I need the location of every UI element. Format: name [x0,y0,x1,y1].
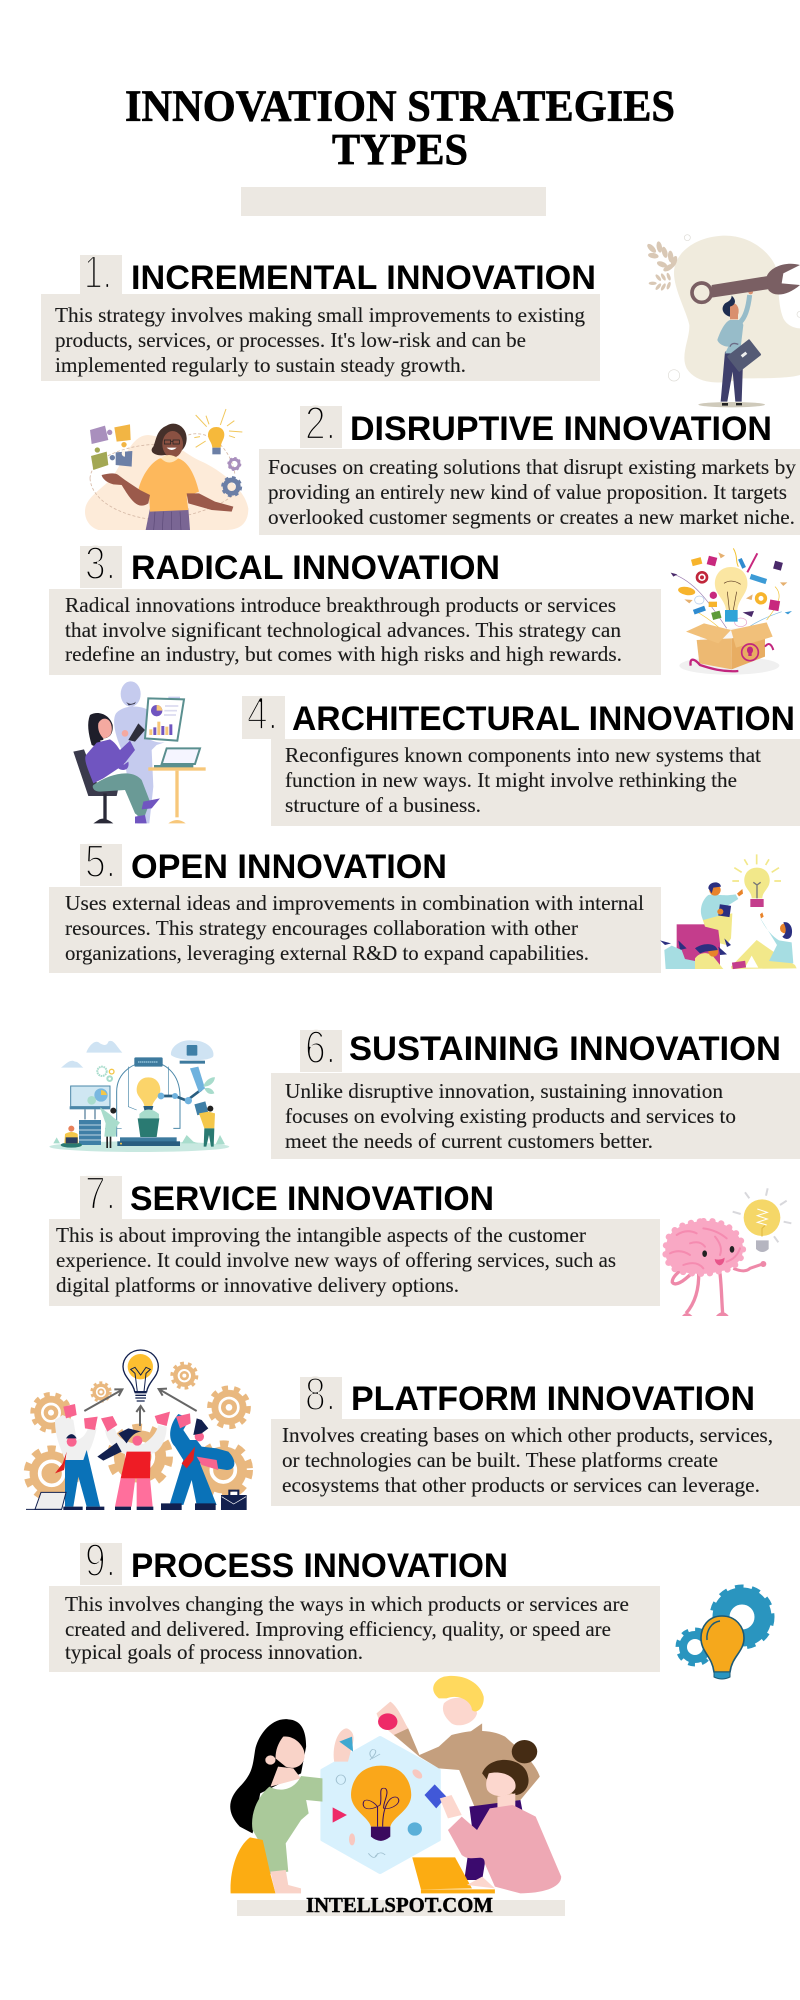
text block: implemented regularly to sustain steady growth. [55,353,466,377]
number 7: 7. [85,1167,116,1219]
panel: 7 service innovation [49,1167,660,1306]
heading: ARCHITECTURAL INNOVATION [292,700,795,738]
number 1: 1. [84,246,112,298]
number 6: 6. [305,1021,336,1073]
icon: idea bulb bursting from box [671,548,792,675]
panel: 1 incremental innovation [41,246,600,381]
text block: typical goals of process innovation. [65,1640,363,1664]
illustration: team around idea hexagon [230,1676,561,1893]
text block [41,294,600,381]
heading: RADICAL INNOVATION [131,549,500,587]
text block: Radical innovations introduce breakthrough products or services [65,593,616,617]
icon: lab with bulb and robotic arm [49,1040,229,1152]
text block: Reconfigures known components into new systems that [285,743,761,767]
text block [271,739,800,826]
heading: PLATFORM INNOVATION [351,1380,755,1418]
text block: structure of a business. [285,793,481,817]
panel: 2 disruptive innovation [259,397,800,535]
text block [49,1586,660,1672]
heading: SUSTAINING INNOVATION [349,1030,781,1068]
text block: function in new ways. It might involve rethinking the [285,768,737,792]
text block [49,887,661,973]
icon: pink brain holding bulb [665,1188,791,1316]
panel: 9 process innovation [49,1534,660,1672]
icon: woman with puzzle pieces and bulb [85,409,248,530]
heading: PROCESS INNOVATION [131,1547,508,1585]
text block: Unlike disruptive innovation, sustaining innovation [285,1079,723,1103]
text block [49,589,661,675]
text block: This involves changing the ways in which products or services are [65,1592,629,1616]
text block: resources. This strategy encourages collaboration with other [65,916,578,940]
number 3: 3. [85,537,116,589]
text block: overlooked customer segments or creates a new market niche. [268,505,795,529]
icon: team reaching for bulb [660,854,797,969]
text block: experience. It could involve new ways of offering services, such as [56,1248,616,1272]
subtitle bar [241,187,546,216]
text block: meet the needs of current customers better. [285,1129,653,1153]
icon: gears and light bulb [678,1588,772,1679]
text block: that involve significant technological advances. This strategy can [65,618,621,642]
text block [271,1073,800,1159]
text block: or technologies can be built. These platforms create [282,1448,718,1472]
text block: redefine an industry, but comes with high risks and high rewards. [65,642,622,666]
text block: Uses external ideas and improvements in combination with internal [65,891,644,915]
text block: Focuses on creating solutions that disrupt existing markets by [268,455,796,479]
heading: OPEN INNOVATION [131,848,447,886]
icon: woman and robot with chart [73,681,206,823]
number 2: 2. [305,397,336,449]
text block: providing an entirely new kind of value proposition. It targets [268,480,787,504]
text block [49,1219,660,1306]
number 9: 9. [85,1534,116,1586]
footer: source bar: INTELLSPOT.COM [306,1893,493,1917]
heading: SERVICE INNOVATION [130,1180,494,1218]
text block: This strategy involves making small improvements to existing [55,303,585,327]
text block: ecosystems that other products or services can leverage. [282,1473,760,1497]
number 8: 8. [305,1368,336,1420]
text block: Involves creating bases on which other products, services, [282,1423,773,1447]
text block: This is about improving the intangible aspects of the customer [56,1223,586,1247]
title [125,82,675,174]
icon: man lifting wrench [646,235,800,407]
panel: 6 sustaining innovation [271,1021,800,1159]
text block [259,449,800,535]
text block: products, services, or processes. It's low-risk and can be [55,328,526,352]
panel: 3 radical innovation [49,537,661,675]
icon: team under gears and bulb [26,1350,249,1510]
number 4: 4. [247,687,278,739]
panel: 8 platform innovation [271,1368,800,1506]
title: TYPES [332,125,468,174]
number 5: 5. [85,835,116,887]
heading: INCREMENTAL INNOVATION [131,259,596,297]
footer: source bar [237,1893,565,1917]
text block: organizations, leveraging external R&D to expand capabilities. [65,941,589,965]
title: INNOVATION STRATEGIES [125,82,675,130]
text block [271,1419,800,1506]
heading: DISRUPTIVE INNOVATION [350,410,772,448]
text block: digital platforms or innovative delivery options. [56,1273,459,1297]
panel: 4 architectural innovation [242,687,800,826]
text block: created and delivered. Improving efficiency, quality, or speed are [65,1617,611,1641]
panel: 5 open innovation [49,835,661,973]
text block: focuses on evolving existing products and services to [285,1104,736,1128]
